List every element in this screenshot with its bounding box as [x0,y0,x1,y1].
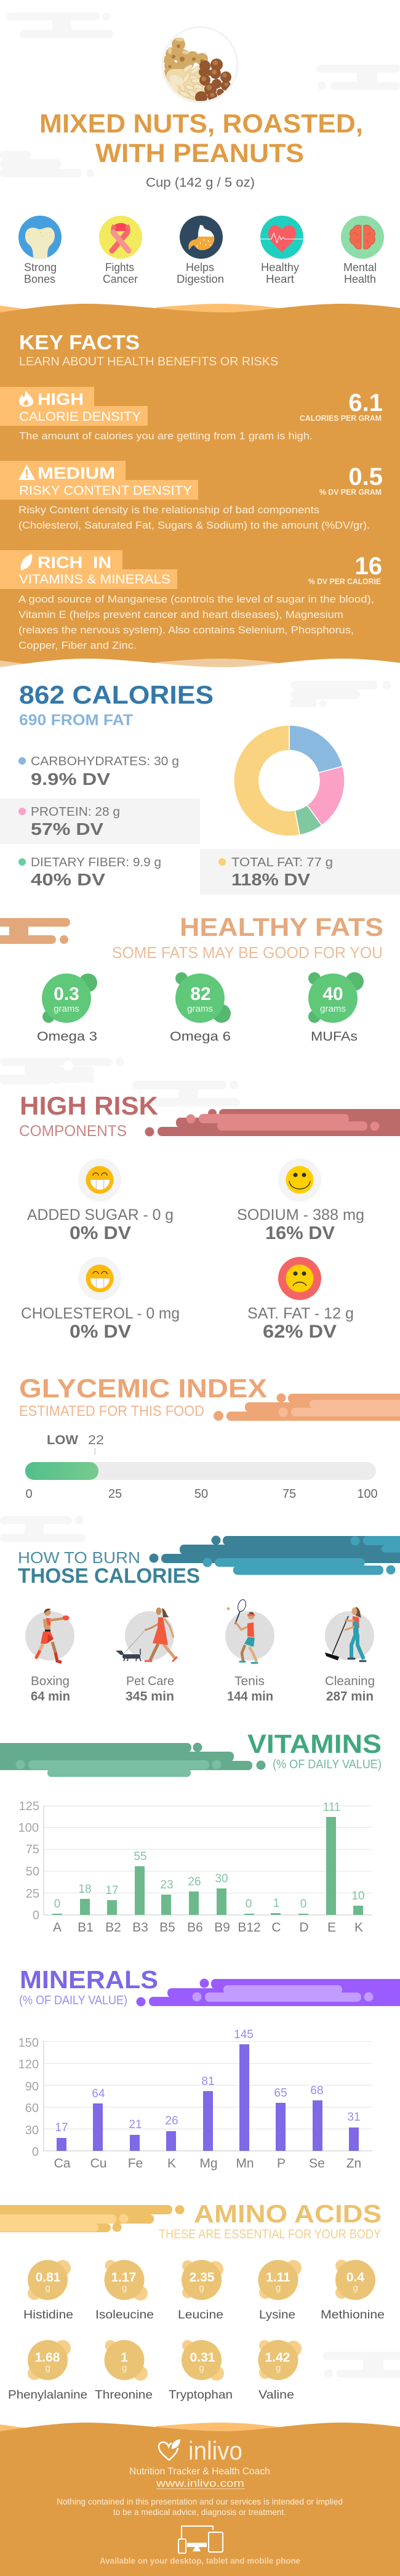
bar chart: vitamins: 23 [160,1879,174,1891]
heading: minerals [19,1965,158,2007]
bar chart: vitamins: B5 [159,1920,175,1935]
bar chart: vitamins: 26 [188,1875,201,1888]
glycemic index gauge: 25 [108,1487,122,1501]
heading: healthy fats: HEALTHY FATS [180,912,383,941]
decorative cloud: calories [290,681,391,707]
healthy fat: mufas: 40 [322,984,343,1004]
bar chart: vitamins: D [299,1920,309,1935]
bar chart: vitamins: 0 [300,1898,306,1911]
food photo: mixed nuts [162,27,238,104]
healthy fat: omega 6: grams [187,1004,213,1014]
bar chart: vitamins: 0 [54,1898,60,1911]
icon: flame [19,390,33,407]
key fact: rich in vitamins and minerals: Vitamin E (helps prevent cancer and heart diseases), Magnesium [18,609,343,620]
legend: dietary fiber [18,856,161,889]
heading: high risk components [19,1091,158,1140]
key fact: medium risky content density: MEDIUM [38,464,115,482]
amino acid: methionine: Methionine [321,2309,385,2322]
benefit labels: Bones [24,273,55,285]
amino acid: tryptophan: 0.31 [190,2350,215,2365]
bar chart: minerals: 81 [201,2075,215,2088]
bar chart: vitamins: K [354,1920,363,1935]
glycemic index gauge: 22 [88,1433,104,1447]
heading: key facts [19,331,278,368]
figure: person sweeping [325,1607,366,1661]
healthy fat: omega 3: 0.3 [54,984,79,1004]
glycemic index gauge: 0 [25,1487,33,1501]
bar chart: minerals: Cu [90,2156,106,2171]
benefit labels [24,261,377,285]
amino acid: leucine: Leucine [178,2309,223,2322]
healthy fat: mufas [308,972,364,1044]
healthy fat: omega 3: Omega 3 [37,1030,97,1044]
decorative cloud: burn section [0,1516,86,1542]
bar chart: vitamins: 0 [33,1909,39,1922]
amino acid: phenylalanine: Phenylalanine [8,2389,87,2402]
bar chart: minerals: K [167,2156,176,2171]
legend: dietary fiber: DIETARY FIBER: 9.9 g [31,856,161,869]
title: MIXED NUTS, ROASTED, [39,109,363,139]
heading: vitamins: VITAMINS [247,1729,382,1759]
bar chart: minerals: Mg [199,2156,218,2171]
icon: strong bones [18,216,62,260]
key fact: high calorie density: CALORIE DENSITY [19,410,141,424]
logo: inlivo: inlivo [188,2436,242,2465]
healthy fat: mufas: grams [320,1004,346,1014]
key fact: medium risky content density: 0.5 [348,463,383,490]
bar chart: minerals: Zn [346,2156,361,2171]
amino acid: lysine: 1.11 [266,2270,290,2285]
bar chart: vitamins: B12 [238,1920,261,1935]
heading: high risk components: HIGH RISK [20,1091,158,1120]
bar chart: vitamins: E [327,1920,336,1935]
icon: mental health brain [341,216,384,259]
icon: helps digestion stomach [180,216,223,259]
activity: cleaning: 287 min [326,1689,374,1704]
bar chart: vitamins: C [271,1920,281,1935]
heading: amino acids: AMINO ACIDS [194,2200,382,2228]
bar chart: minerals: 90 [25,2080,39,2094]
key fact: rich in vitamins and minerals: A good source of Manganese (controls the level of sugar in the blood), [18,593,374,605]
figure: tennis player [226,1599,257,1663]
amino acid: lysine [258,2260,302,2322]
bar chart: vitamins: 1 [273,1897,279,1910]
legend: carbohydrates: CARBOHYDRATES: 30 g [31,755,179,768]
bar chart: vitamins: 25 [26,1887,39,1901]
bar chart: minerals: 17 [55,2121,68,2134]
amino acid: phenylalanine [8,2340,87,2402]
health benefits row [18,216,384,285]
amino acid: isoleucine [95,2260,154,2322]
risk item: sodium: SODIUM - 388 mg [237,1206,364,1224]
glycemic index gauge: 50 [194,1487,208,1501]
benefit labels: Fights [105,261,134,274]
key fact: rich in vitamins and minerals: 16 [354,553,382,580]
key fact: medium risky content density: % DV PER GRAM [319,487,382,497]
decoration: healthy fats band [0,918,70,944]
key fact: high calorie density: The amount of calories you are getting from 1 gram is high. [19,430,313,442]
activity: tennis: 144 min [227,1689,273,1704]
bar chart: vitamins: 10 [351,1890,365,1903]
risk item: saturated fat: 62% DV [263,1322,337,1342]
heading: high risk components: COMPONENTS [19,1123,127,1140]
figure: woman walking dog [116,1607,177,1661]
key fact: high calorie density: HIGH [38,390,84,408]
amino acid: valine [258,2340,302,2402]
legend: protein: PROTEIN: 28 g [31,805,120,819]
bar chart: vitamins: B2 [105,1920,121,1935]
heading: how to burn those calories: HOW TO BURN [18,1548,140,1567]
risk item: saturated fat [247,1257,354,1342]
bar chart: minerals: 60 [25,2102,39,2115]
risk item: cholesterol [21,1257,180,1342]
amino acid: histidine [23,2260,73,2322]
heading: calories: 862 CALORIES [19,680,214,709]
amino acid: leucine [178,2260,223,2322]
bar chart: minerals: Mn [236,2156,254,2171]
footer text: Nothing contained in this presentation and our services is intended or implied [57,2497,343,2506]
heading: how to burn those calories [18,1548,200,1588]
key fact: rich in vitamins and minerals [0,550,382,651]
bar chart: vitamins: A [53,1920,62,1935]
amino acid: lysine: Lysine [259,2309,295,2322]
activity: cleaning [325,1607,375,1704]
title: WITH PEANUTS [95,139,304,168]
bar chart: minerals: 31 [347,2111,361,2124]
icon: leaf [21,554,32,571]
bar chart: minerals: 64 [92,2087,105,2100]
bar chart: minerals: 145 [234,2028,254,2041]
risk item: added sugar: 0% DV [70,1223,131,1243]
glycemic index gauge: 100 [357,1487,378,1501]
activity: pet care: Pet Care [126,1675,174,1688]
activity: tennis: Tenis [234,1675,265,1688]
amino acid: methionine: 0.4 [346,2270,364,2285]
heading: healthy fats: SOME FATS MAY BE GOOD FOR YOU [112,943,383,962]
heading: minerals: MINERALS [20,1965,158,1994]
amino acid: lysine: g [276,2283,281,2293]
legend: carbohydrates: 9.9% DV [31,770,110,789]
bar chart: minerals: 0 [32,2145,39,2159]
benefit labels: Mental [343,261,377,274]
decoration: high risk band [145,1109,400,1136]
activity: boxing: Boxing [31,1675,70,1688]
decoration: amino acids band [0,2205,185,2232]
heading: calories [19,680,214,729]
icon: fights cancer ribbon [99,216,142,259]
amino acid: tryptophan: Tryptophan [169,2389,233,2402]
risk item: sodium [237,1158,364,1243]
key fact: rich in vitamins and minerals: (relaxes the nervous system). Also contains Selenium, Phosphorus, [18,624,354,636]
donut chart: calories by macronutrient [234,725,345,836]
amino acid: tryptophan [169,2340,233,2402]
decorative clouds: header [0,12,400,177]
amino acid: isoleucine: 1.17 [111,2270,136,2285]
amino acid: valine: g [276,2363,281,2373]
key fact: high calorie density [0,387,383,442]
amino acid: leucine: g [199,2283,204,2293]
bar chart: vitamins: 50 [26,1865,39,1879]
bar chart: minerals [18,2028,372,2171]
bar chart: vitamins: 55 [134,1850,147,1863]
amino acid: isoleucine: Isoleucine [95,2309,154,2322]
amino acid: histidine: 0.81 [36,2270,61,2285]
heading: vitamins: (% OF DAILY VALUE) [273,1758,382,1771]
footer text: Nutrition Tracker & Health Coach [129,2466,270,2477]
bar chart: minerals: 68 [310,2084,324,2097]
risk item: added sugar: ADDED SUGAR - 0 g [27,1206,174,1224]
benefit labels: Strong [24,261,57,274]
benefit labels: Helps [186,261,214,274]
bar chart: minerals: 30 [25,2124,39,2137]
heading: how to burn those calories: THOSE CALORIES [18,1564,200,1588]
icon: warning [18,465,35,480]
risk item: sodium: 16% DV [265,1223,335,1243]
activity: pet care [116,1607,177,1704]
heading: glycemic index: ESTIMATED FOR THIS FOOD [19,1403,204,1420]
amino acid: threonine: Threonine [95,2389,153,2402]
bar chart: minerals: 26 [165,2115,178,2127]
heading: key facts: KEY FACTS [19,331,140,354]
bar chart: vitamins: 0 [246,1898,252,1911]
heading: key facts: LEARN ABOUT HEALTH BENEFITS OR RISKS [19,356,278,368]
activity: pet care: 345 min [126,1689,174,1704]
amino acid: leucine: 2.35 [190,2270,215,2285]
activity: boxing: 64 min [31,1689,70,1704]
bar chart: minerals: 150 [18,2036,39,2050]
availability note: Available on your desktop, tablet and mobile phone [100,2556,300,2566]
logo: inlivo [159,2436,242,2465]
glycemic index gauge [25,1433,378,1501]
healthy fat: omega 3: grams [54,1004,79,1014]
heading: vitamins [247,1729,382,1771]
bar chart: vitamins: 125 [19,1800,39,1813]
key fact: rich in vitamins and minerals: % DV PER CALORIE [308,577,381,586]
amino acid: histidine: g [45,2283,50,2293]
bar chart: vitamins: B1 [78,1920,94,1935]
heading: healthy fats [112,912,383,962]
bar chart: minerals: P [277,2156,286,2171]
amino acid: phenylalanine: g [45,2363,50,2373]
bar chart: minerals: Ca [54,2156,71,2171]
legend: dietary fiber: 40% DV [31,870,105,889]
risk item: cholesterol: 0% DV [70,1322,131,1342]
figure: boxer [36,1609,69,1662]
amino acid: phenylalanine: 1.68 [35,2350,60,2365]
bar chart: vitamins: 30 [215,1872,228,1885]
key fact: rich in vitamins and minerals: Copper, Fiber and Zinc. [18,640,137,651]
legend: total fat: TOTAL FAT: 77 g [231,856,333,869]
risk item: saturated fat: SAT. FAT - 12 g [247,1305,354,1322]
benefit labels: Healthy [261,261,299,274]
amino acid: valine: Valine [258,2389,294,2402]
heading: glycemic index [19,1374,267,1420]
legend: total fat [200,849,400,895]
key fact: rich in vitamins and minerals: RICH IN [38,553,111,572]
bar chart: minerals: Se [309,2156,325,2171]
footer text: www.inlivo.com [156,2477,244,2489]
title [39,109,363,168]
legend: carbohydrates [18,755,179,789]
serving size: Cup (142 g / 5 oz) [146,176,255,190]
legend: protein [0,798,200,844]
key fact: medium risky content density [0,461,383,531]
amino acid: methionine: g [353,2283,358,2293]
benefit labels: Health [344,273,376,285]
glycemic index gauge: LOW [47,1433,78,1447]
panel: key facts background [0,304,400,684]
amino acid: valine: 1.42 [265,2350,290,2365]
key fact: rich in vitamins and minerals: VITAMINS & MINERALS [19,572,170,587]
benefit labels: Digestion [177,273,224,285]
healthy fat: mufas: MUFAs [311,1030,358,1044]
healthy fat: omega 3 [37,973,97,1044]
benefit labels: Heart [266,273,294,285]
activity: tennis [225,1599,274,1704]
heading: minerals: (% OF DAILY VALUE) [19,1994,127,2007]
amino acid: isoleucine: g [122,2283,127,2293]
key fact: medium risky content density: RISKY CONTENT DENSITY [19,484,192,498]
bar chart: vitamins: 17 [105,1884,119,1897]
amino acid: histidine: Histidine [23,2309,73,2322]
bar chart: minerals: 21 [129,2118,142,2131]
bar chart: minerals: 65 [274,2087,287,2100]
activity: cleaning: Cleaning [325,1675,375,1688]
bar chart: vitamins: 111 [323,1801,340,1814]
amino acid: threonine [95,2340,153,2402]
heading: calories: 690 FROM FAT [19,712,133,729]
bar chart: vitamins: 18 [78,1883,92,1896]
risk item: cholesterol: CHOLESTEROL - 0 mg [21,1305,180,1322]
decorative cloud: amino acids [322,2352,400,2378]
bar chart: vitamins: 75 [26,1843,39,1856]
activity: boxing [25,1609,74,1704]
decoration: minerals band [137,1979,400,2006]
icon: devices [178,2526,223,2553]
footer text [57,2466,343,2517]
key fact: high calorie density: CALORIES PER GRAM [300,413,382,423]
footer text: to be a medical advice, diagnosis or treatment. [113,2507,286,2517]
heading: amino acids [159,2200,382,2241]
legend: total fat: 118% DV [231,870,310,889]
bar chart: vitamins: B3 [132,1920,148,1935]
decoration: burn band [149,1535,400,1575]
glycemic index gauge: 75 [282,1487,296,1501]
decorative clouds: high risk [0,1057,240,1107]
bar chart: vitamins: B6 [187,1920,203,1935]
bar chart: vitamins [18,1800,372,1935]
heading: glycemic index: GLYCEMIC INDEX [19,1374,267,1404]
amino acid: methionine [321,2260,385,2322]
key fact: medium risky content density: Risky Content density is the relationship of bad components [18,504,319,516]
bar chart: minerals: Fe [128,2156,143,2171]
benefit labels: Cancer [103,273,138,285]
healthy fat: omega 6: Omega 6 [170,1030,231,1044]
decoration: vitamins band [0,1742,266,1777]
healthy fat: omega 6 [170,972,231,1044]
legend: protein: 57% DV [31,819,103,839]
bar chart: vitamins: 100 [18,1821,39,1835]
amino acid: tryptophan: g [199,2363,204,2373]
amino acid: threonine: 1 [121,2350,128,2365]
risk item: added sugar [27,1158,174,1243]
icon: healthy heart [260,216,303,259]
bar chart: minerals: 120 [18,2058,39,2071]
key fact: medium risky content density: (Cholesterol, Saturated Fat, Sugars & Sodium) to the amount (%DV/gr). [18,519,370,531]
bar chart: vitamins: B9 [214,1920,230,1935]
key fact: high calorie density: 6.1 [348,389,383,416]
amino acid: threonine: g [122,2363,127,2373]
healthy fat: omega 6: 82 [190,984,211,1004]
decoration: glycemic band [214,1394,400,1421]
panel: footer background [0,2423,400,2576]
